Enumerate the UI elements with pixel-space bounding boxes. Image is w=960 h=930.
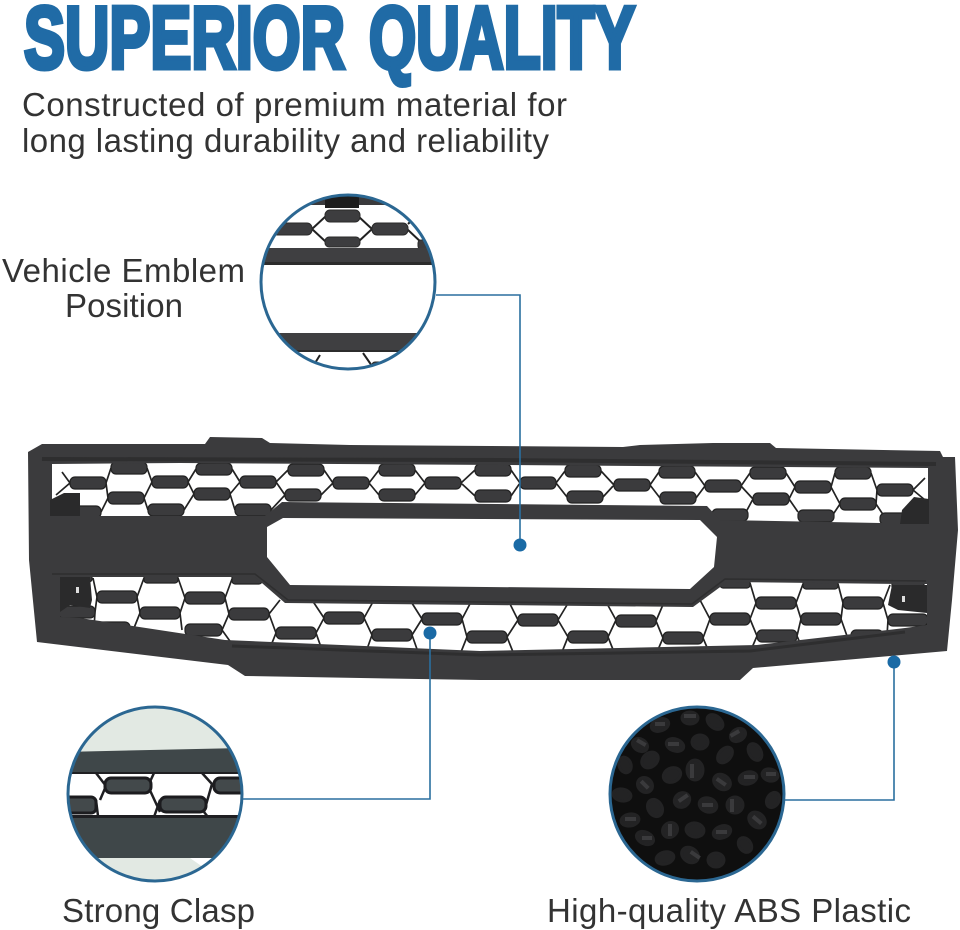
subtitle text xyxy=(22,86,567,159)
grille mesh lines xyxy=(56,468,925,652)
callout: high-quality ABS plastic xyxy=(547,656,911,929)
grille frame shading xyxy=(42,459,936,655)
label: Position xyxy=(65,287,183,324)
callout: strong clasp xyxy=(55,626,436,929)
zoom circle: clasp xyxy=(66,706,244,882)
label: Strong Clasp xyxy=(62,892,255,929)
label: Vehicle Emblem xyxy=(2,252,245,289)
grille corner clips xyxy=(50,493,929,613)
label xyxy=(2,252,245,324)
grille clip glints xyxy=(76,587,905,602)
subtitle text: Constructed of premium material for xyxy=(22,86,567,123)
leader line and dot xyxy=(436,295,526,552)
label: High-quality ABS Plastic xyxy=(547,892,911,929)
grille product image xyxy=(28,437,958,680)
zoom circle: ABS pellets xyxy=(605,702,789,886)
leader line and dot xyxy=(785,656,900,800)
callout: vehicle emblem position xyxy=(2,195,526,552)
grille mesh bars xyxy=(58,462,928,644)
leader line and dot xyxy=(243,626,436,799)
grille outer frame xyxy=(28,437,958,680)
subtitle text: long lasting durability and reliability xyxy=(22,122,550,159)
zoom circle: emblem opening xyxy=(260,195,436,372)
